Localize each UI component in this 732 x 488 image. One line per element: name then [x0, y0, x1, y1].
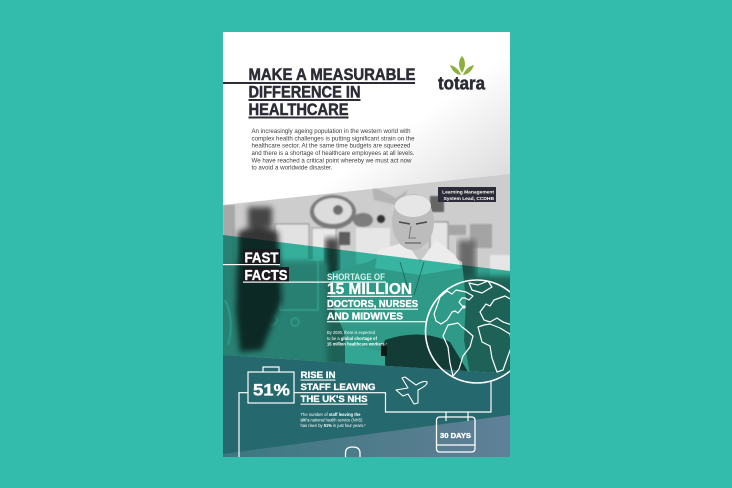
- infographic poster: [223, 32, 510, 457]
- stat: staff leaving heading: STAFF LEAVING: [300, 382, 376, 393]
- intro paragraph: and there is a shortage of healthcare employees at all levels.: [252, 150, 415, 157]
- stat: 15 million shortage: AND MIDWIVES: [327, 312, 403, 322]
- equipment bottom left: [215, 262, 327, 367]
- intro paragraph: We have reached a critical point whereby we must act now: [252, 157, 412, 164]
- title: MAKE A MEASURABLE: [248, 66, 416, 84]
- man: [330, 194, 470, 375]
- stat: staff leaving heading: [300, 370, 376, 405]
- intro paragraph: to avoid a worldwide disaster.: [252, 164, 333, 172]
- stat note: NHS staff: UK's national health service (NHS): [300, 418, 363, 423]
- stat: staff leaving heading: RISE IN: [300, 370, 336, 381]
- connector line right: [294, 382, 491, 412]
- teal photo overlay: [223, 235, 510, 374]
- stat note: global shortage: 15 million healthcare workers.¹: [327, 342, 388, 346]
- totara logo: totara: [438, 72, 486, 94]
- stat: 15 million shortage: SHORTAGE OF: [327, 272, 385, 282]
- caption: job title label: System Lead, CCDHB: [443, 196, 494, 202]
- title: [223, 66, 416, 119]
- stat note: NHS staff: has risen by 51% in just four years.²: [300, 423, 366, 428]
- title: HEALTHCARE: [248, 101, 349, 119]
- fast facts heading: [223, 249, 386, 284]
- stat note: global shortage: [327, 330, 388, 346]
- intro paragraph: An increasingly ageing population in the western world with: [252, 128, 411, 135]
- fast facts heading: FACTS: [244, 268, 288, 284]
- slate section: [223, 415, 510, 460]
- icon: briefcase with 51 percent: [248, 367, 294, 403]
- dark teal section: [223, 355, 510, 460]
- icon: aeroplane: [396, 377, 427, 404]
- stat note: NHS staff: The number of staff leaving the: [300, 412, 361, 417]
- intro paragraph: [252, 128, 415, 172]
- stat note: global shortage: to be a global shortage of: [327, 336, 378, 341]
- totara logo: [438, 56, 486, 94]
- blurred background figures: [325, 238, 339, 276]
- poster sheet: [215, 32, 528, 460]
- caption: job title label: Learning Management: [442, 190, 494, 196]
- stat: 15 million shortage: [327, 272, 426, 322]
- blurred staff member: [236, 207, 282, 352]
- title: DIFFERENCE IN: [248, 84, 360, 102]
- intro paragraph: complex health challenges is putting significant strain on the: [252, 135, 415, 142]
- icon: globe: [424, 279, 510, 384]
- icon: calendar 30 days: 30 DAYS: [440, 431, 471, 440]
- stat note: global shortage: By 2030, there is expected: [327, 330, 376, 335]
- stat: staff leaving heading: THE UK'S NHS: [300, 394, 368, 405]
- stat note: NHS staff: [300, 412, 366, 428]
- connector line left: [239, 393, 248, 457]
- white header panel: [223, 32, 510, 212]
- icon: partial arch at page bottom: [346, 447, 360, 458]
- stat: 15 million shortage: DOCTORS, NURSES: [327, 299, 418, 310]
- intro paragraph: healthcare sector. At the same time budgets are squeezed: [252, 142, 411, 150]
- icon: briefcase with 51 percent: 51%: [253, 382, 290, 400]
- caption: job title label: [438, 187, 496, 202]
- fast facts heading: FAST: [244, 250, 279, 266]
- icon: calendar 30 days: [436, 412, 475, 452]
- photo: surgeon in operating theatre: [223, 174, 510, 374]
- room shadow in lower half: [319, 272, 510, 374]
- stat: 15 million shortage: 15 MILLION: [327, 281, 412, 298]
